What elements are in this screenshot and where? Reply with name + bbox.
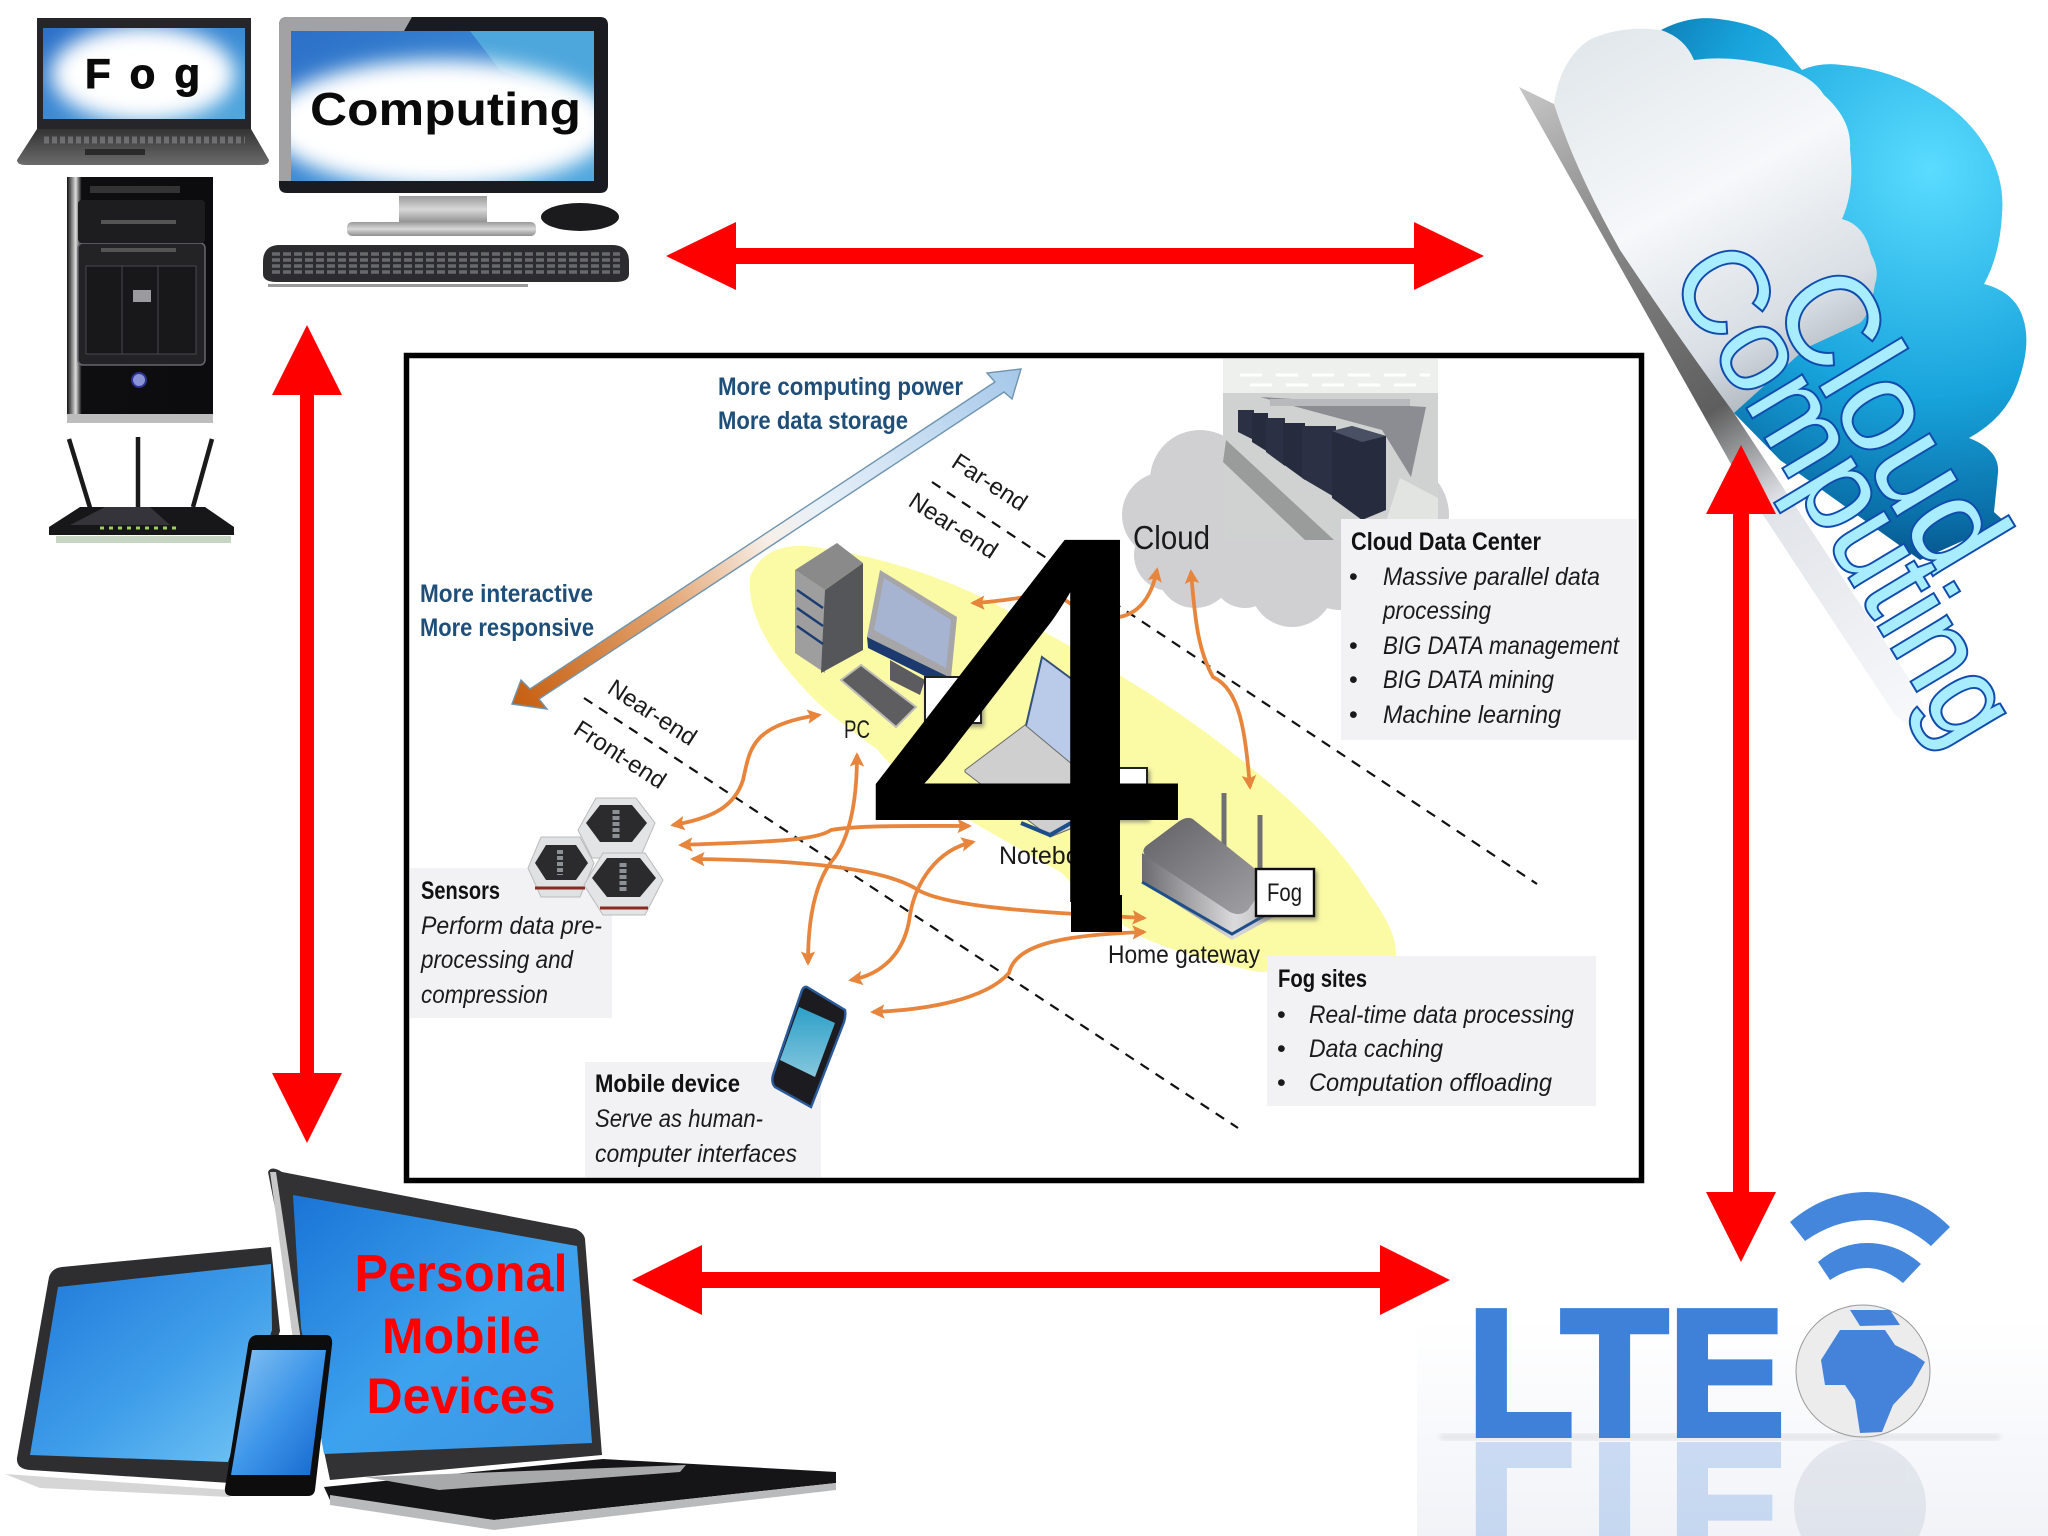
arrow: mobile devices to LTE xyxy=(632,1245,1450,1315)
text: more computing power xyxy=(718,373,963,435)
icon: notebook xyxy=(965,657,1147,837)
panel: Cloud Data Center: Massive parallel data xyxy=(1383,563,1600,591)
text: Personal Mobile Devices: Devices xyxy=(366,1368,556,1424)
dashed tier boundary upper xyxy=(932,482,1537,884)
panel: Fog sites: Computation offloading xyxy=(1309,1069,1552,1097)
white cloud xyxy=(1554,29,1877,413)
panel: Fog sites: Fog sites xyxy=(1278,965,1367,993)
tier labels: Near-end xyxy=(904,487,1002,565)
fog badge on notebook xyxy=(1090,768,1147,818)
panel: Cloud Data Center: Machine learning xyxy=(1383,701,1561,729)
icon: smartphone xyxy=(225,1335,332,1496)
panel: Cloud Data Center: BIG DATA mining xyxy=(1383,666,1554,694)
text: Notebook label: Notebook xyxy=(999,842,1107,870)
panel: Sensors xyxy=(410,868,612,1018)
panel: Sensors: Sensors xyxy=(421,877,500,905)
arrow: fog to mobile devices xyxy=(272,325,342,1143)
text: LTE: LTE xyxy=(1467,1273,1785,1474)
icon: sensors xyxy=(528,798,663,915)
icon: home gateway router xyxy=(1142,793,1274,940)
text: Home gateway label: Home gateway xyxy=(1108,941,1260,969)
panel: Cloud Data Center: • xyxy=(1349,563,1358,591)
diagonal shadow strip xyxy=(1519,87,1940,751)
panel: Sensors: processing and xyxy=(420,946,574,974)
icon: desktop monitor with Computing label xyxy=(263,17,629,287)
text: Personal Mobile Devices: Mobile xyxy=(382,1308,540,1364)
panel: Sensors: compression xyxy=(421,981,548,1009)
big numeral 4 overlay: 4 xyxy=(862,425,1196,1014)
fog badge on router xyxy=(1256,869,1314,916)
icon: desktop monitor with Computing label: Computing xyxy=(310,83,581,135)
pale floor band xyxy=(1417,1320,2048,1536)
panel: personal mobile devices xyxy=(5,1168,836,1530)
fog badge on router: Fog xyxy=(1267,879,1302,907)
icon: wireless router xyxy=(49,437,234,543)
floor shadow line xyxy=(1440,1434,2000,1440)
panel: Fog sites: • xyxy=(1277,1001,1286,1029)
panel: Fog sites: Real-time data processing xyxy=(1309,1001,1574,1029)
text: Cloud label: Cloud xyxy=(1133,519,1210,556)
panel: LTE logo xyxy=(1417,1192,2048,1536)
text: Personal Mobile Devices: Personal xyxy=(354,1245,568,1303)
icon: tower PC xyxy=(67,177,213,423)
icon: laptop with Fog label: F o g xyxy=(85,50,200,97)
panel: Cloud Data Center xyxy=(1341,519,1637,740)
dashed tier boundary lower xyxy=(584,698,1238,1128)
icon: grey cloud xyxy=(1122,430,1449,627)
photo: data center xyxy=(1223,359,1438,540)
panel: Cloud Data Center: Cloud Data Center xyxy=(1351,528,1541,556)
icon: PC xyxy=(795,543,981,727)
text: more computing power: More data storage xyxy=(718,407,908,435)
panel border xyxy=(406,356,1642,1180)
LTE reflection xyxy=(1476,1440,1926,1536)
text: more computing power: More computing power xyxy=(718,373,963,401)
panel: Cloud Data Center: • xyxy=(1349,701,1358,729)
arrow: cloud to LTE xyxy=(1706,445,1776,1262)
panel: Mobile device: Serve as human- xyxy=(595,1105,763,1133)
cloud computing text xyxy=(1646,220,2046,765)
icon: mobile phone xyxy=(772,987,845,1107)
tier labels: Far-end xyxy=(947,448,1032,517)
text: more interactive xyxy=(420,580,594,642)
panel: Cloud Data Center: • xyxy=(1349,666,1358,694)
panel: central fog architecture diagram xyxy=(406,356,1642,1180)
panel: Cloud Data Center: processing xyxy=(1382,597,1491,625)
tier labels: Near-end xyxy=(603,674,701,752)
gradient double arrow xyxy=(512,369,1021,709)
arrow: fog to cloud xyxy=(666,222,1484,290)
panel: Fog sites: Data caching xyxy=(1309,1035,1443,1063)
panel: Fog sites: • xyxy=(1277,1035,1286,1063)
panel: Cloud Data Center: BIG DATA management xyxy=(1383,632,1620,660)
panel: Mobile device: computer interfaces xyxy=(595,1140,797,1168)
text: PC label: PC xyxy=(844,716,870,744)
icon: laptop with text xyxy=(268,1168,836,1530)
icon: tablet xyxy=(5,1247,280,1497)
tier labels xyxy=(569,448,1032,795)
fog badge on PC xyxy=(925,677,981,723)
icon: laptop with Fog label xyxy=(17,18,269,165)
orange data flow arrows xyxy=(673,570,1250,1012)
panel: Cloud Data Center: • xyxy=(1349,632,1358,660)
text: Cloud: Cloud xyxy=(1746,242,2039,596)
panel: cloud computing logo xyxy=(1519,18,2046,765)
panel: Fog sites xyxy=(1267,956,1596,1106)
text: Personal Mobile Devices xyxy=(354,1245,568,1424)
text: more interactive: More responsive xyxy=(420,614,594,642)
panel: Mobile device: Mobile device xyxy=(595,1070,740,1098)
yellow fog region xyxy=(750,546,1396,975)
panel: Fog sites: • xyxy=(1277,1069,1286,1097)
blue cloud xyxy=(1661,18,2026,560)
tier labels: Front-end xyxy=(569,715,671,795)
text: more interactive: More interactive xyxy=(420,580,593,608)
text: Computing: Computing xyxy=(1646,220,2046,765)
icon: wifi arcs xyxy=(1790,1192,1950,1283)
panel: Mobile device xyxy=(585,1062,821,1177)
panel: Sensors: Perform data pre- xyxy=(421,912,602,940)
panel: fog computing devices xyxy=(17,17,629,543)
icon: globe xyxy=(1796,1305,1930,1437)
